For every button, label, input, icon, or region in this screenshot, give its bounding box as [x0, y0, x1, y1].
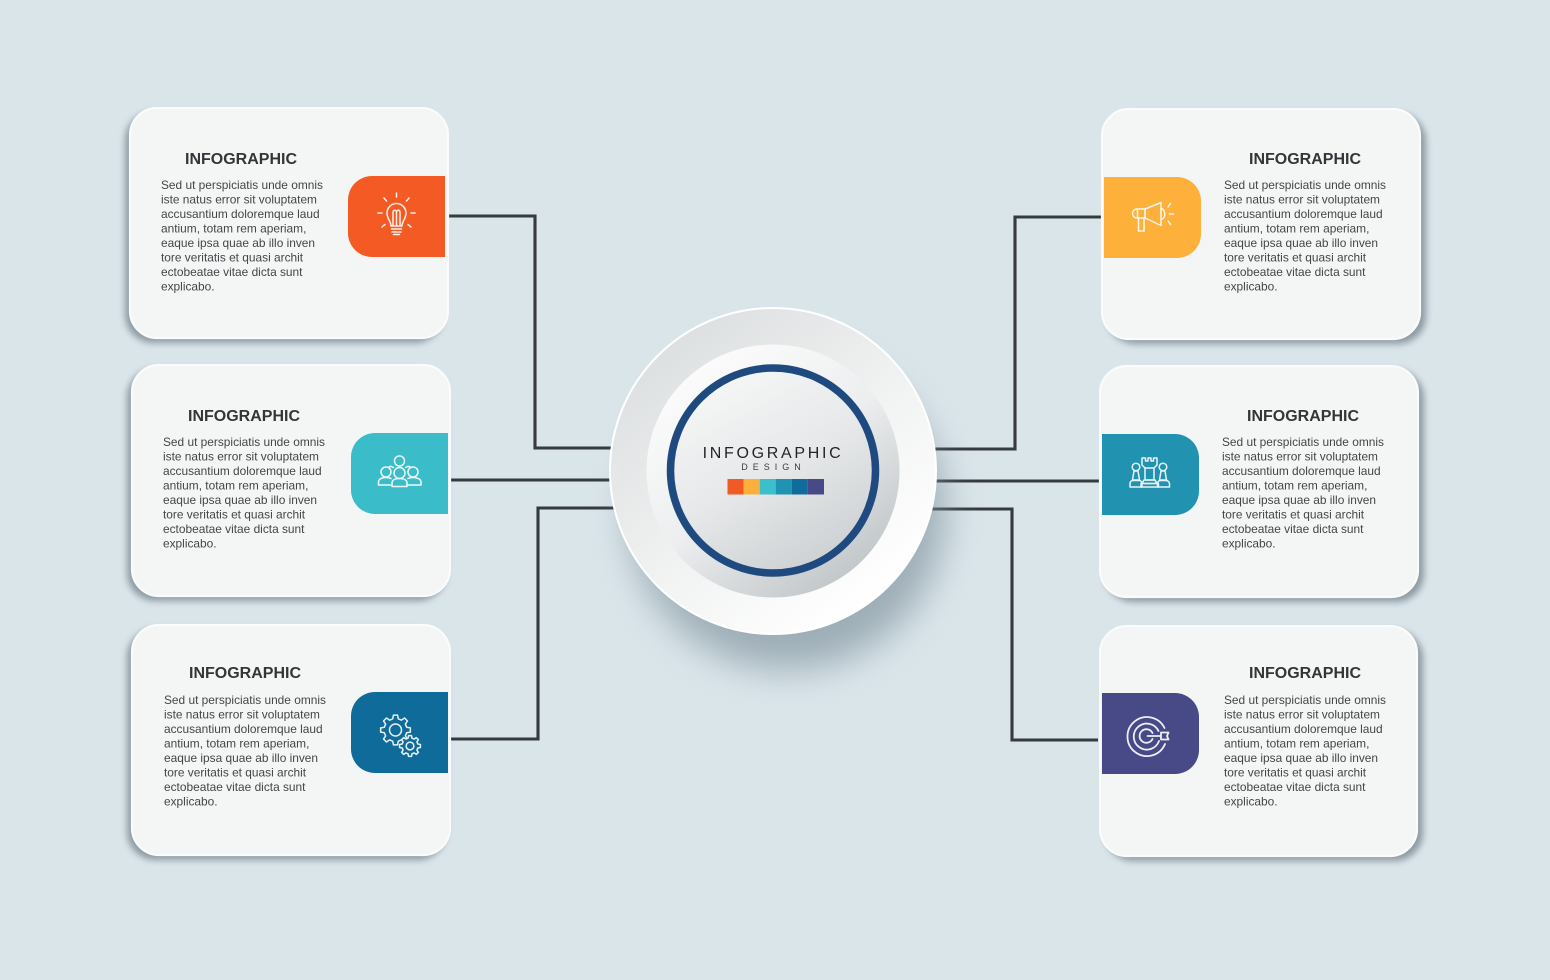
body text: eaque ipsa quae ab illo inven: [164, 751, 318, 765]
panel: card middle right: [1100, 366, 1424, 602]
body text: eaque ipsa quae ab illo inven: [1224, 751, 1378, 765]
central circle: [609, 307, 945, 670]
body text: eaque ipsa quae ab illo inven: [1224, 236, 1378, 250]
tab: dark teal: [1102, 434, 1199, 515]
icon: chess pieces: [1130, 458, 1170, 487]
body text: explicabo.: [1222, 536, 1276, 550]
center subtitle: DESIGN: [741, 462, 806, 472]
body text: eaque ipsa quae ab illo inven: [163, 493, 317, 507]
body text: ectobeatae vitae dicta sunt: [161, 265, 303, 279]
icon: target: [1127, 717, 1168, 756]
body text: accusantium doloremque laud: [164, 722, 323, 736]
body text: explicabo.: [161, 280, 215, 294]
body text: Sed ut perspiciatis unde omnis: [161, 178, 323, 192]
body text: antium, totam rem aperiam,: [164, 736, 309, 750]
heading: INFOGRAPHIC: [1249, 151, 1361, 168]
panel: card bottom right: [1100, 626, 1423, 861]
center title: INFOGRAPHIC: [703, 445, 843, 462]
body text: tore veritatis et quasi archit: [164, 766, 307, 780]
panel: card middle left: [127, 365, 450, 601]
body text: ectobeatae vitae dicta sunt: [1222, 522, 1364, 536]
heading: INFOGRAPHIC: [188, 408, 300, 425]
tab: teal: [351, 433, 448, 514]
heading: INFOGRAPHIC: [1249, 665, 1361, 682]
body text: iste natus error sit voluptatem: [1224, 708, 1380, 722]
tab: orange: [348, 176, 445, 257]
tab: yellow: [1104, 177, 1201, 258]
body text: eaque ipsa quae ab illo inven: [161, 236, 315, 250]
body text: iste natus error sit voluptatem: [1222, 450, 1378, 464]
body text: accusantium doloremque laud: [1222, 464, 1381, 478]
body text: accusantium doloremque laud: [1224, 207, 1383, 221]
body text: tore veritatis et quasi archit: [161, 250, 304, 264]
heading: INFOGRAPHIC: [189, 665, 301, 682]
body text: tore veritatis et quasi archit: [1222, 508, 1365, 522]
tab: blue: [351, 692, 448, 773]
body text: ectobeatae vitae dicta sunt: [1224, 780, 1366, 794]
body text: antium, totam rem aperiam,: [1224, 222, 1369, 236]
icon: light bulb: [378, 193, 415, 234]
body text: explicabo.: [164, 794, 218, 808]
body text: antium, totam rem aperiam,: [161, 222, 306, 236]
body text: iste natus error sit voluptatem: [164, 708, 320, 722]
body text: antium, totam rem aperiam,: [1224, 736, 1369, 750]
icon: megaphone: [1132, 202, 1174, 231]
body text: antium, totam rem aperiam,: [1222, 478, 1367, 492]
icon: people: [378, 456, 421, 486]
body text: accusantium doloremque laud: [163, 464, 322, 478]
body text: ectobeatae vitae dicta sunt: [164, 780, 306, 794]
body text: accusantium doloremque laud: [161, 207, 320, 221]
body text: Sed ut perspiciatis unde omnis: [163, 435, 325, 449]
body text: iste natus error sit voluptatem: [163, 450, 319, 464]
body text: tore veritatis et quasi archit: [163, 508, 306, 522]
panel: card top right: [1102, 109, 1426, 344]
body text: accusantium doloremque laud: [1224, 722, 1383, 736]
body text: explicabo.: [1224, 280, 1278, 294]
body text: Sed ut perspiciatis unde omnis: [164, 693, 326, 707]
body text: Sed ut perspiciatis unde omnis: [1224, 178, 1386, 192]
body text: Sed ut perspiciatis unde omnis: [1222, 435, 1384, 449]
heading: INFOGRAPHIC: [1247, 408, 1359, 425]
body text: iste natus error sit voluptatem: [1224, 192, 1380, 206]
heading: INFOGRAPHIC: [185, 151, 297, 168]
body text: ectobeatae vitae dicta sunt: [1224, 265, 1366, 279]
body text: antium, totam rem aperiam,: [163, 478, 308, 492]
colour bar: [728, 479, 824, 494]
body text: tore veritatis et quasi archit: [1224, 766, 1367, 780]
body text: Sed ut perspiciatis unde omnis: [1224, 693, 1386, 707]
tab: indigo: [1102, 693, 1199, 774]
icon: gears: [381, 715, 420, 756]
panel: card bottom left: [127, 625, 450, 860]
panel: card top left: [125, 108, 448, 343]
connector lines: [449, 216, 1101, 740]
body text: explicabo.: [163, 536, 217, 550]
body text: iste natus error sit voluptatem: [161, 192, 317, 206]
body text: tore veritatis et quasi archit: [1224, 250, 1367, 264]
body text: eaque ipsa quae ab illo inven: [1222, 493, 1376, 507]
body text: ectobeatae vitae dicta sunt: [163, 522, 305, 536]
body text: explicabo.: [1224, 794, 1278, 808]
